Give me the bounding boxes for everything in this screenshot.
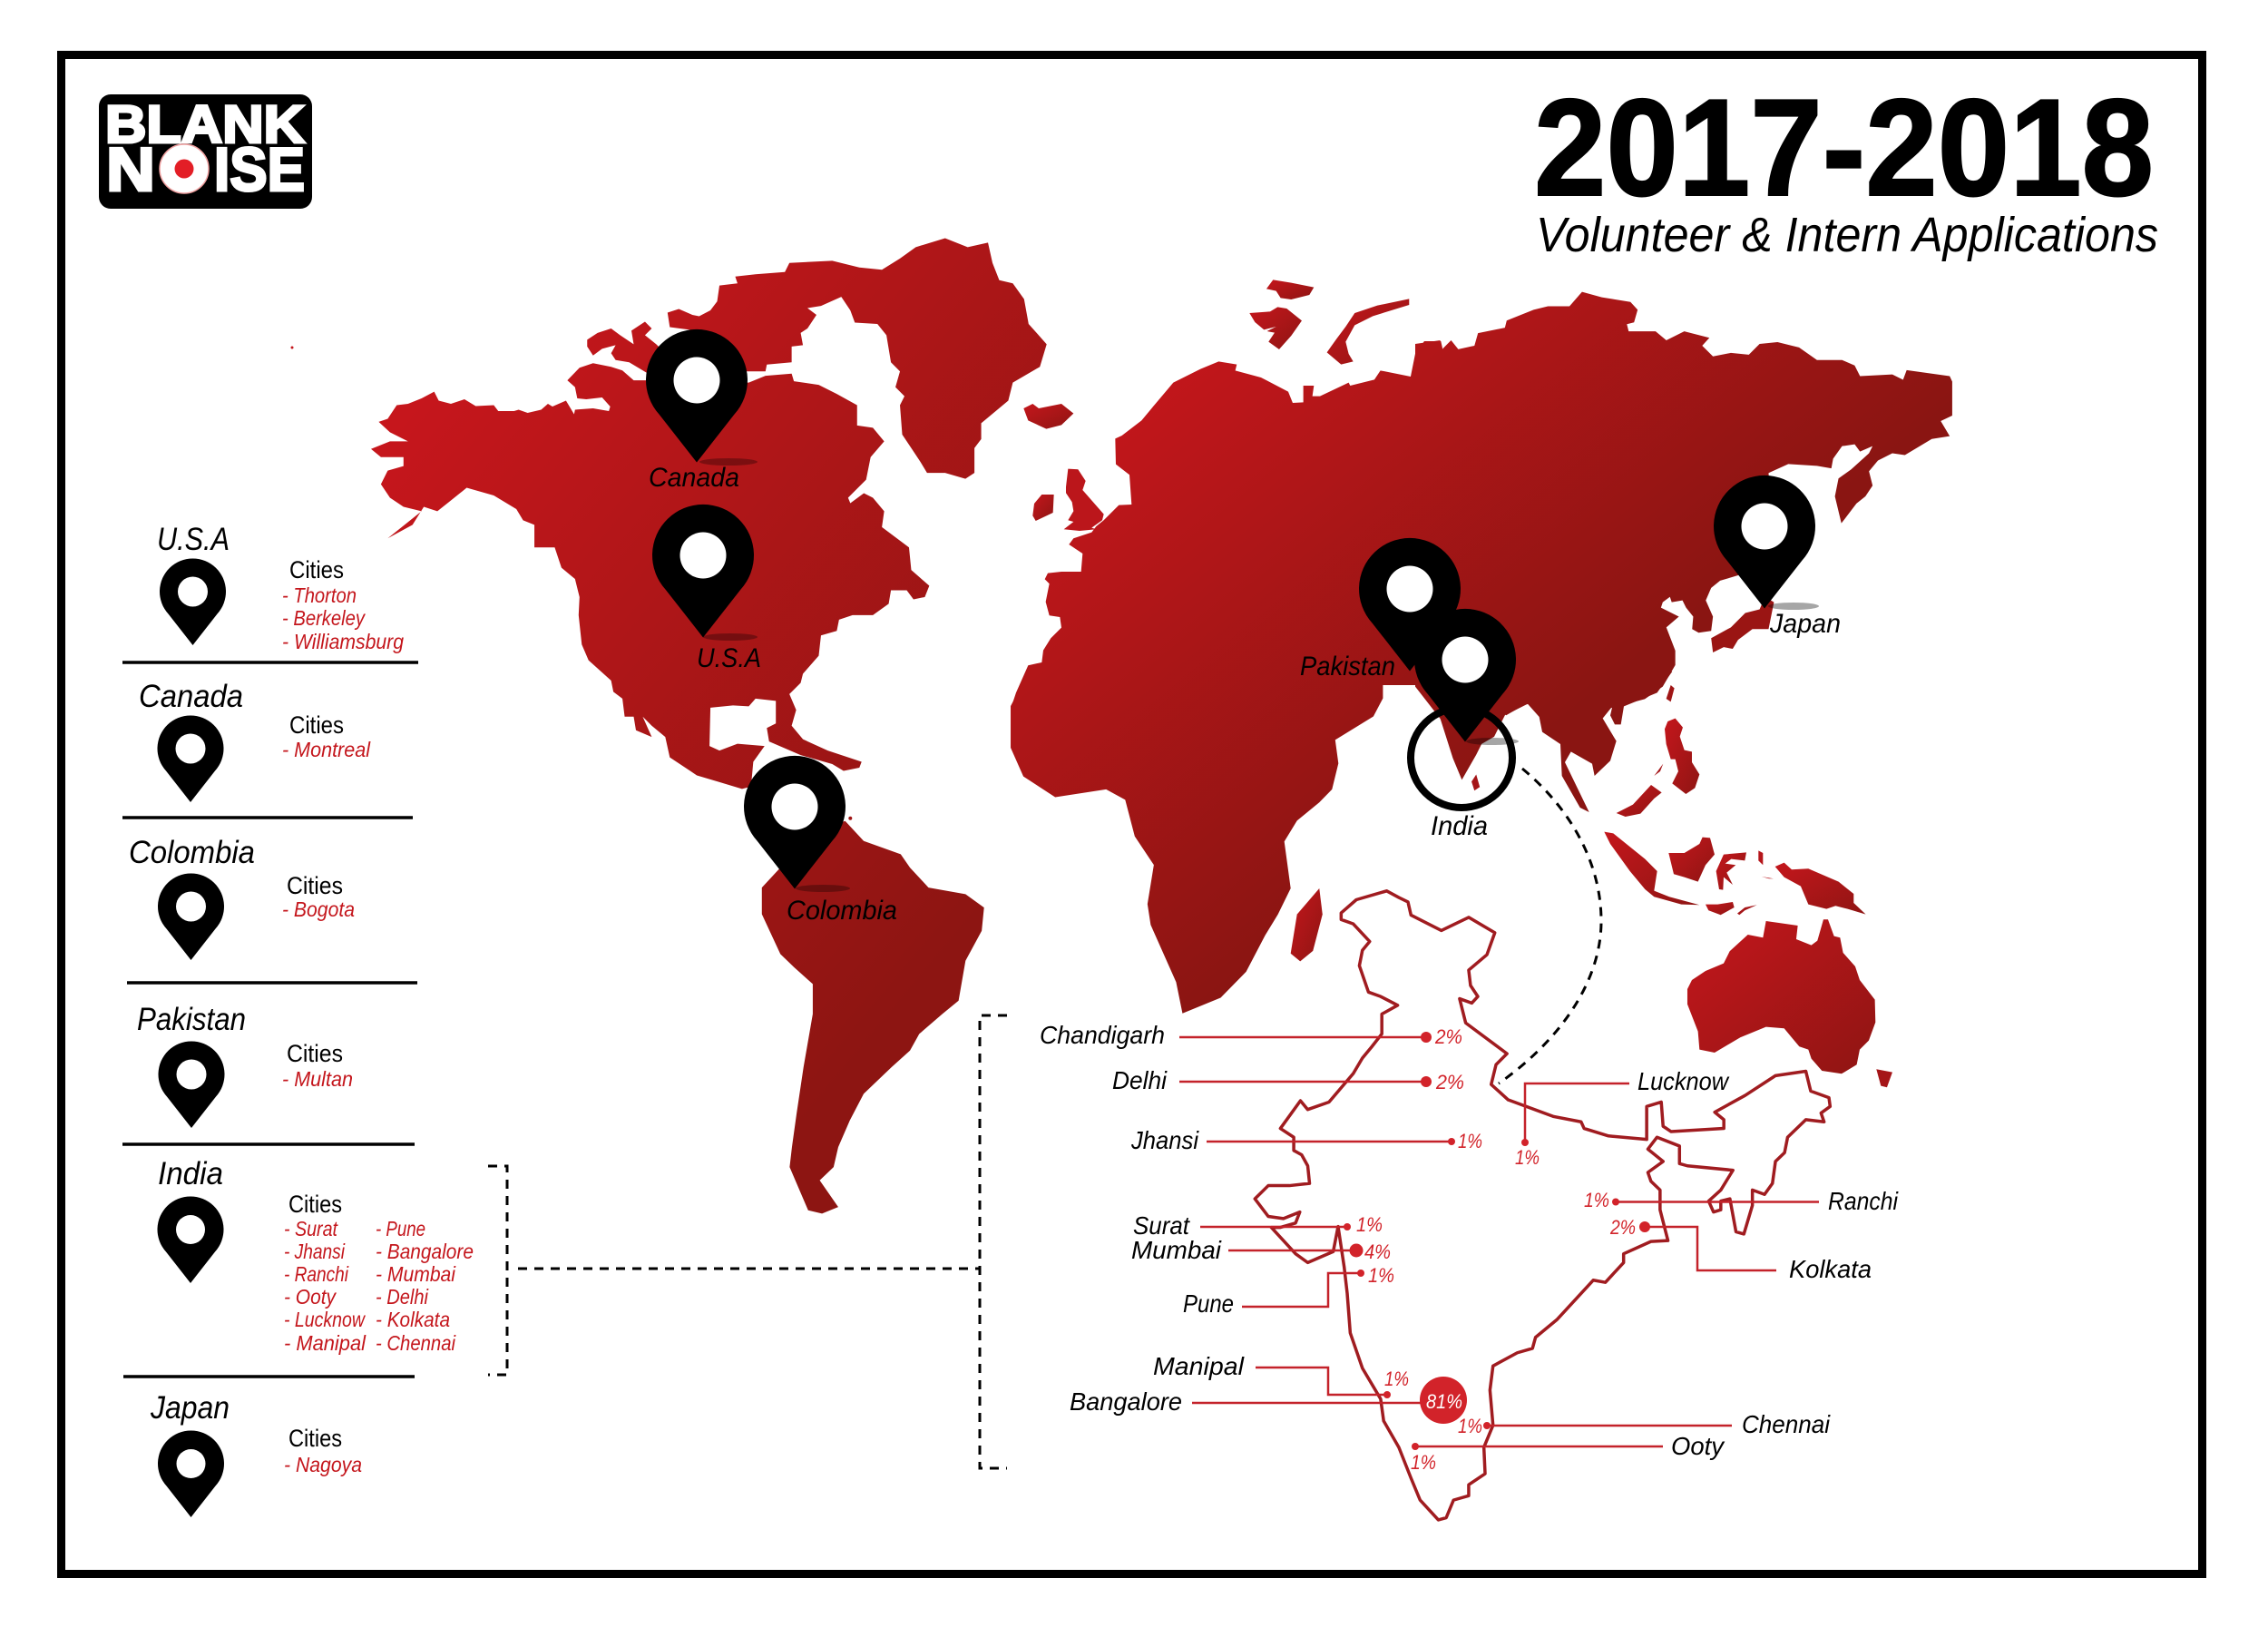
callout: Ranchi xyxy=(1584,1187,1899,1215)
logo: Blank Noise: ISE xyxy=(214,135,305,204)
map: Philippines xyxy=(1665,719,1699,794)
map: Japan xyxy=(1711,597,1774,652)
legend: India: Cities xyxy=(288,1191,342,1218)
callout: Delhi xyxy=(1112,1066,1464,1094)
legend: India: - Manipal xyxy=(284,1331,367,1355)
legend: India: - Bangalore xyxy=(376,1240,474,1263)
callout: Surat xyxy=(1133,1211,1383,1240)
callout: Jhansi: 1% xyxy=(1458,1130,1482,1152)
callout: Ranchi: 1% xyxy=(1584,1189,1609,1211)
subtitle: Volunteer & Intern Applications xyxy=(1536,208,2158,262)
legend: Colombia xyxy=(129,835,355,960)
legend: India xyxy=(158,1156,474,1355)
map: Australia xyxy=(1687,919,1875,1073)
map: Europe, west Asia and north Africa xyxy=(1012,279,1442,717)
callout: Bangalore xyxy=(1070,1377,1467,1424)
legend: India: India xyxy=(158,1156,223,1191)
legend: Pakistan: Cities xyxy=(287,1040,343,1067)
callout: Pune xyxy=(1183,1264,1394,1318)
map pin: Colombia xyxy=(744,756,850,892)
callout: Ooty xyxy=(1411,1432,1725,1474)
callout: Ranchi: Ranchi xyxy=(1828,1187,1899,1215)
legend: Canada xyxy=(139,679,371,802)
callout: Chennai xyxy=(1458,1410,1831,1438)
label: Japan: Japan xyxy=(1769,609,1841,639)
callout: Jhansi: Jhansi xyxy=(1130,1126,1199,1154)
map: South America xyxy=(762,821,984,1213)
map: Novaya Zemlya xyxy=(1327,299,1409,365)
legend: India: - Kolkata xyxy=(376,1308,450,1331)
label: India: India xyxy=(1431,811,1488,841)
map: North America and Greenland xyxy=(371,238,1047,820)
map pin: India xyxy=(1414,609,1519,745)
callout: Lucknow: 1% xyxy=(1515,1146,1540,1169)
logo: Blank Noise: N xyxy=(106,135,155,204)
legend: U.S.A: - Thorton xyxy=(282,583,357,607)
callout: Ooty: Ooty xyxy=(1671,1432,1725,1460)
legend: India: - Mumbai xyxy=(376,1262,456,1286)
map: Tasmania xyxy=(1876,1069,1892,1087)
callout: Delhi: 2% xyxy=(1435,1071,1464,1093)
callout: Chandigarh xyxy=(1040,1021,1462,1049)
legend: India: - Pune xyxy=(376,1217,425,1240)
label: Canada: Canada xyxy=(649,463,739,493)
map: Borneo xyxy=(1668,838,1715,882)
map: Asia xyxy=(1415,292,1952,790)
legend: Colombia: Cities xyxy=(287,872,343,899)
callout: Chennai: 1% xyxy=(1458,1415,1482,1437)
legend: Pakistan: - Multan xyxy=(282,1067,353,1091)
logo: Blank Noise: O xyxy=(160,135,209,204)
callout: Pune: Pune xyxy=(1183,1289,1234,1318)
legend: Colombia: - Bogota xyxy=(282,897,355,921)
legend: U.S.A: Cities xyxy=(289,556,344,583)
callout: Surat: 1% xyxy=(1356,1213,1383,1236)
legend: India: - Lucknow xyxy=(284,1308,366,1331)
callout: Lucknow xyxy=(1515,1067,1730,1169)
callout: Chandigarh: Chandigarh xyxy=(1040,1021,1165,1049)
map: Sumatra and Java xyxy=(1604,832,1699,905)
legend: Canada: - Montreal xyxy=(282,738,371,761)
legend: India: - Ooty xyxy=(284,1285,337,1309)
dashed bracket: India cities to India map xyxy=(488,1015,1007,1468)
world map xyxy=(290,238,1952,1213)
callout: Kolkata xyxy=(1609,1216,1872,1283)
legend: U.S.A: - Williamsburg xyxy=(282,630,404,653)
legend: Pakistan xyxy=(137,1002,353,1128)
map: Taiwan xyxy=(1667,685,1675,701)
callout: Delhi: Delhi xyxy=(1112,1066,1168,1094)
map: Sulawesi xyxy=(1716,852,1746,890)
map pin: Pakistan xyxy=(1359,538,1461,672)
callout: Bangalore: Bangalore xyxy=(1070,1387,1182,1416)
label: Pakistan: Pakistan xyxy=(1300,652,1395,681)
map pin: Japan xyxy=(1714,475,1819,610)
logo: Blank Noise xyxy=(99,94,312,209)
callout: Bangalore: 81% xyxy=(1426,1390,1462,1413)
callout: Chandigarh: 2% xyxy=(1434,1025,1462,1048)
label: U.S.A: U.S.A xyxy=(697,643,761,673)
callout: Manipal: Manipal xyxy=(1153,1352,1245,1380)
dashed connector: India circle to India map xyxy=(1499,769,1601,1083)
callout: Lucknow: Lucknow xyxy=(1637,1067,1730,1095)
callout: Manipal xyxy=(1153,1352,1409,1398)
legend: India: - Delhi xyxy=(376,1285,429,1309)
callout: Mumbai: Mumbai xyxy=(1131,1236,1222,1264)
map: Ireland xyxy=(1032,495,1054,521)
callout: Pune: 1% xyxy=(1368,1264,1394,1287)
legend: Canada: Canada xyxy=(139,679,243,714)
map: southern Africa and Arabia xyxy=(1011,670,1383,1014)
legend: U.S.A: U.S.A xyxy=(157,522,230,557)
map: Sri Lanka xyxy=(1471,774,1480,790)
map: Great Britain xyxy=(1064,469,1104,531)
callout: Chennai: Chennai xyxy=(1742,1410,1831,1438)
legend: India: - Jhansi xyxy=(284,1240,346,1263)
India highlight circle xyxy=(1411,708,1512,808)
map pin: U.S.A xyxy=(652,505,758,641)
legend: U.S.A: - Berkeley xyxy=(282,606,366,630)
legend: Canada: Cities xyxy=(289,711,344,739)
callout: Manipal: 1% xyxy=(1384,1368,1409,1390)
map: Malaysian Borneo xyxy=(1617,785,1662,817)
legend: India: - Chennai xyxy=(376,1331,456,1355)
legend: Japan: Japan xyxy=(150,1390,230,1426)
callout: Kolkata: 2% xyxy=(1609,1216,1636,1239)
callout: Jhansi xyxy=(1130,1126,1482,1154)
map pin: Canada xyxy=(646,329,758,466)
callout: Surat: Surat xyxy=(1133,1211,1190,1240)
legend: India: - Surat xyxy=(284,1217,338,1240)
India outline map xyxy=(1255,891,1830,1520)
map: Southeast Asia and islands xyxy=(1506,672,1892,1087)
legend: India: - Ranchi xyxy=(284,1262,349,1286)
map: Timor and lesser islands xyxy=(1706,902,1735,915)
legend: Japan xyxy=(150,1390,362,1517)
callout: Mumbai xyxy=(1131,1236,1391,1264)
legend: Colombia: Colombia xyxy=(129,835,255,870)
map: New Guinea xyxy=(1775,863,1866,915)
legend: Pakistan: Pakistan xyxy=(137,1002,246,1037)
callout: Mumbai: 4% xyxy=(1364,1240,1391,1263)
map: Svalbard xyxy=(1249,307,1302,349)
logo: Blank Noise: BLANK xyxy=(105,95,305,154)
map: Iceland xyxy=(1023,404,1073,429)
legend: Japan: Cities xyxy=(288,1425,342,1452)
callout: Ooty: 1% xyxy=(1411,1451,1436,1474)
callout: Kolkata: Kolkata xyxy=(1789,1255,1872,1283)
map: Madagascar xyxy=(1291,888,1323,961)
label: Colombia: Colombia xyxy=(787,896,897,926)
legend: Japan: - Nagoya xyxy=(284,1453,362,1476)
title: years: 2017-2018 xyxy=(1534,71,2154,225)
legend: U.S.A xyxy=(157,522,404,653)
